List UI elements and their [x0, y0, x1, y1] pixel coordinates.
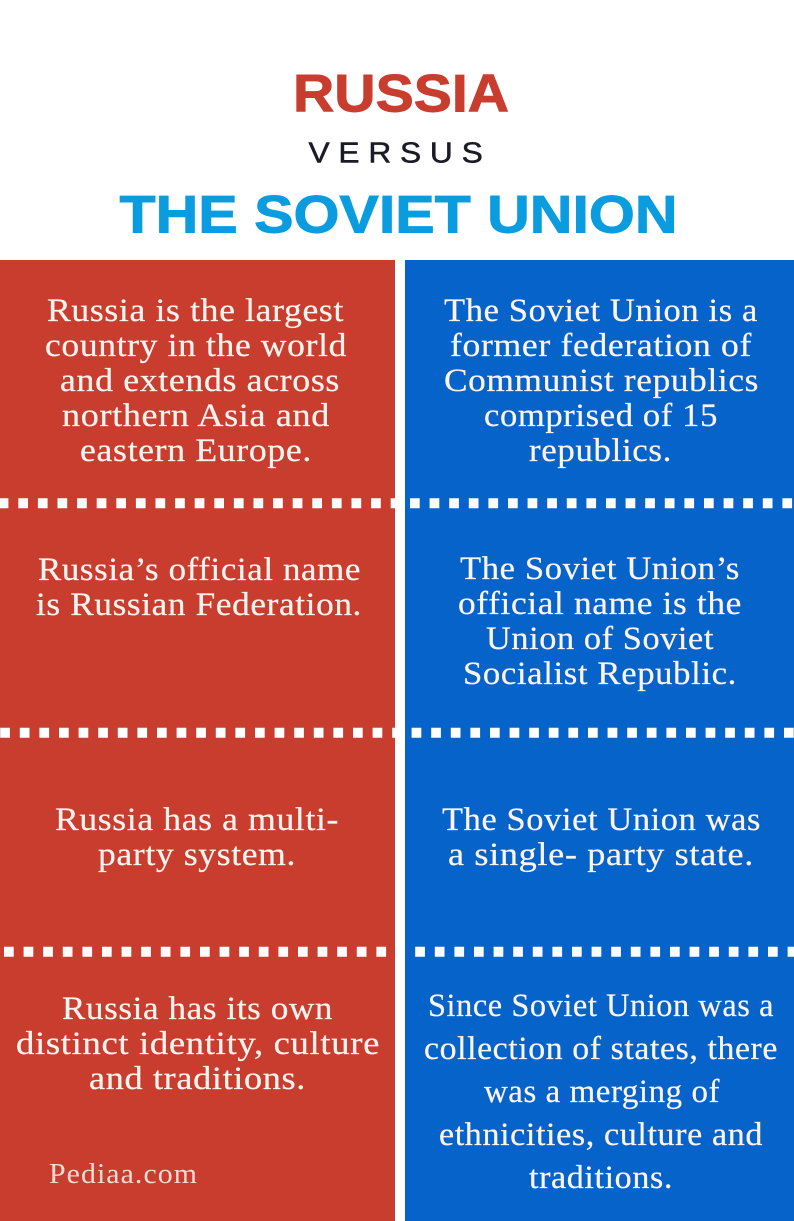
- text: Soviet Union merging of ethnicities: ethnicities, culture and: [439, 1117, 763, 1153]
- text: Soviet Union definition: former federation of: [450, 328, 752, 364]
- text: Russia definition: and extends across: [60, 363, 340, 399]
- text: Russia official name: is Russian Federation.: [36, 587, 362, 623]
- text: Soviet Union party system: a single- party state.: [448, 837, 754, 873]
- text: Russia identity: [16, 991, 380, 1097]
- title: The Soviet Union: THE SOVIET UNION: [120, 186, 678, 245]
- text: Soviet Union definition: The Soviet Union is a: [444, 293, 758, 329]
- text: Russia identity: distinct identity, culture: [16, 1026, 380, 1062]
- panel: Soviet Union column: [405, 260, 794, 1221]
- text: Soviet Union official name: official name is the: [458, 586, 742, 622]
- text: Soviet Union official name: The Soviet Union’s: [460, 551, 740, 587]
- panel: Russia column: [0, 260, 395, 1221]
- text: Soviet Union merging of ethnicities: was a merging of: [484, 1074, 720, 1110]
- text: Russia party system: party system.: [98, 837, 296, 873]
- text: Russia definition: country in the world: [45, 328, 347, 364]
- text: Russia official name: [36, 552, 362, 623]
- text: Soviet Union merging of ethnicities: collection of states, there: [424, 1031, 778, 1067]
- text: Soviet Union merging of ethnicities: Since Soviet Union was a: [428, 988, 774, 1024]
- text: Soviet Union merging of ethnicities: traditions.: [529, 1160, 673, 1196]
- text: Soviet Union party system: The Soviet Union was: [442, 802, 761, 838]
- text: Russia official name: Russia’s official name: [38, 552, 361, 588]
- source credit: Pediaa.com: [49, 1159, 198, 1190]
- text: Soviet Union definition: [444, 293, 759, 469]
- text: Soviet Union official name: Socialist Republic.: [463, 656, 737, 692]
- text: Soviet Union official name: [458, 551, 742, 692]
- text: Russia identity: Russia has its own: [62, 991, 333, 1027]
- text: Soviet Union party system: [442, 802, 761, 873]
- text: Soviet Union definition: Communist republics: [444, 363, 759, 399]
- text: Soviet Union definition: republics.: [529, 433, 672, 469]
- text: Russia party system: [55, 802, 339, 873]
- text: Soviet Union merging of ethnicities: [424, 988, 778, 1196]
- text: Russia definition: eastern Europe.: [80, 433, 312, 469]
- text: Russia identity: and traditions.: [89, 1061, 306, 1097]
- subtitle: versus: VERSUS: [308, 138, 492, 170]
- title: Russia: RUSSIA: [293, 65, 509, 124]
- text: Russia definition: northern Asia and: [62, 398, 330, 434]
- text: Russia definition: [45, 293, 347, 469]
- text: Soviet Union definition: comprised of 15: [484, 398, 718, 434]
- text: Russia party system: Russia has a multi-: [55, 802, 339, 838]
- text: Soviet Union official name: Union of Soviet: [486, 621, 714, 657]
- text: Russia definition: Russia is the largest: [47, 293, 344, 329]
